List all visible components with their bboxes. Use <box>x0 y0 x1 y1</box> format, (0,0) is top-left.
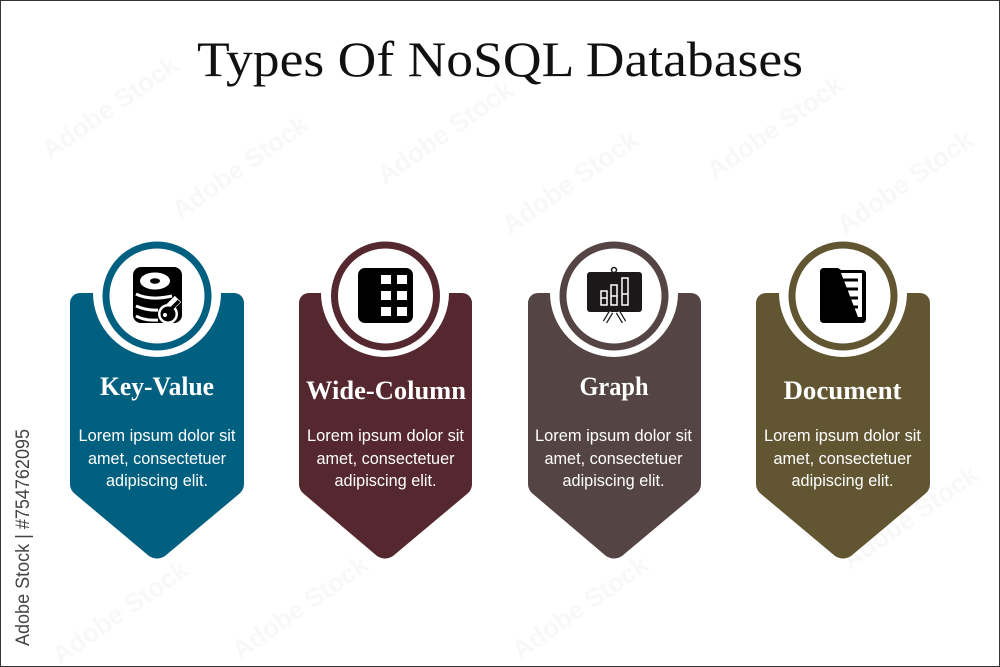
heading: Graph <box>580 372 649 401</box>
text block: adipiscing elit. <box>334 472 436 490</box>
ring <box>334 245 436 347</box>
text block: amet, consectetuer <box>316 450 455 468</box>
icon: table columns <box>358 268 413 323</box>
text block: amet, consectetuer <box>544 450 683 468</box>
card shape <box>70 293 244 558</box>
icon: database with key <box>133 267 182 324</box>
panel: Document <box>756 245 930 558</box>
text: Adobe Stock <box>831 124 979 240</box>
heading: Document <box>784 376 902 405</box>
text: Adobe Stock <box>46 554 194 667</box>
card shape <box>299 293 472 558</box>
text block: adipiscing elit. <box>792 472 894 490</box>
text block <box>78 427 236 490</box>
text block: amet, consectetuer <box>774 450 912 468</box>
text block: adipiscing elit. <box>106 472 208 490</box>
panel: Key-Value <box>70 245 244 558</box>
text block: adipiscing elit. <box>562 472 664 490</box>
text: Adobe Stock <box>166 109 314 225</box>
heading: Key-Value <box>100 372 214 401</box>
panel: Wide-Column <box>299 245 472 558</box>
text block <box>764 427 921 490</box>
text: Adobe Stock <box>701 69 849 185</box>
text block: amet, consectetuer <box>88 450 226 468</box>
text block: Lorem ipsum dolor sit <box>78 427 236 445</box>
text block <box>307 427 464 490</box>
text: Adobe Stock <box>836 459 984 575</box>
ring <box>106 245 208 347</box>
text block: Lorem ipsum dolor sit <box>764 427 921 445</box>
text block <box>535 427 692 490</box>
text: Adobe Stock <box>36 49 184 165</box>
credit: vertical stock text: Adobe Stock | #754762095 <box>13 429 34 646</box>
ring <box>563 245 665 347</box>
heading: Wide-Column <box>306 376 467 405</box>
text block: Lorem ipsum dolor sit <box>307 427 464 445</box>
icon: document <box>820 268 866 323</box>
text: Adobe Stock <box>371 74 519 190</box>
text: Adobe Stock <box>226 549 374 665</box>
text: Adobe Stock <box>496 124 644 240</box>
text: Adobe Stock <box>506 549 654 665</box>
icon: presentation board <box>587 268 642 322</box>
ring <box>792 245 894 347</box>
text block: Lorem ipsum dolor sit <box>535 427 692 445</box>
panel: Graph <box>528 245 701 558</box>
title: Types Of NoSQL Databases <box>197 31 803 87</box>
card shape <box>528 293 701 558</box>
card shape <box>756 293 930 558</box>
